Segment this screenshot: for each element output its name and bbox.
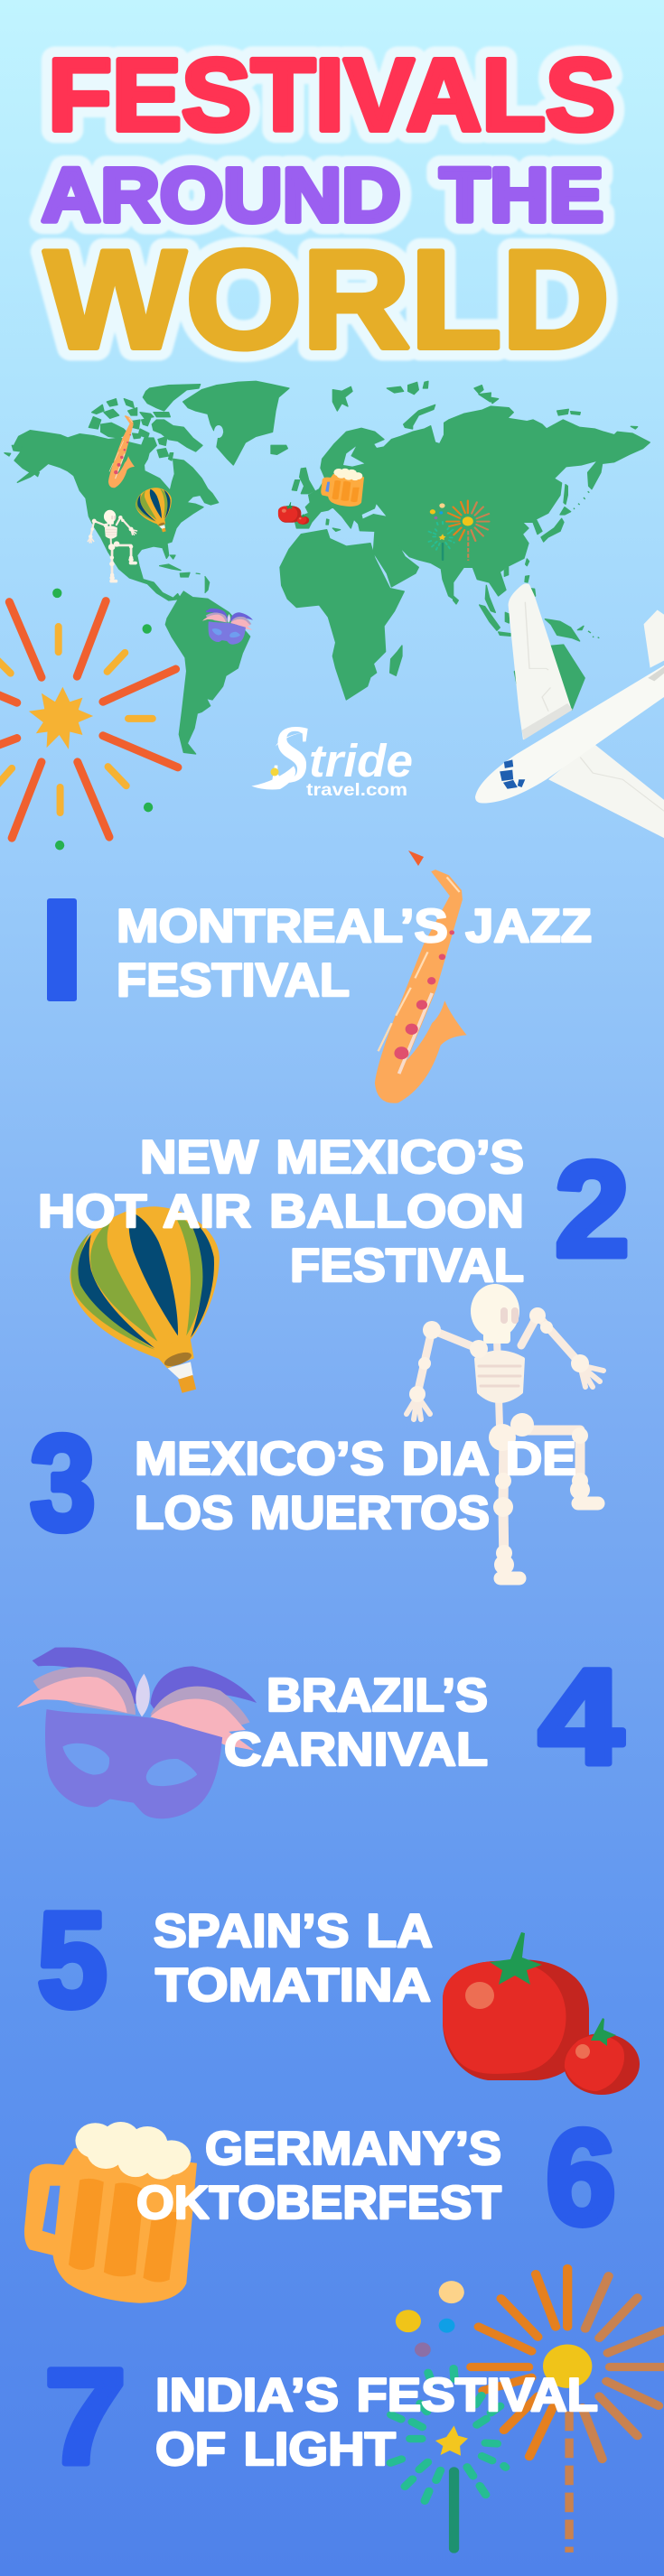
Iceland, British Isles and northern islands — [271, 381, 435, 531]
mini tomatoes on map — [278, 502, 309, 525]
number 5: 5 — [37, 1883, 108, 2035]
Arctic Canada and Caribbean islands — [5, 385, 210, 593]
title line: FESTIVALS: FESTIVALS — [48, 38, 615, 152]
large tomato highlight — [465, 1982, 494, 2009]
floating lights — [396, 2281, 464, 2357]
inland seas — [343, 446, 386, 518]
firework dashed stick — [560, 2412, 578, 2553]
mini fireworks on map — [429, 501, 489, 561]
small tomato light side — [565, 2035, 624, 2091]
title — [42, 38, 615, 377]
balloon burner — [163, 1350, 193, 1369]
number 1: 1 — [23, 875, 99, 1027]
balloon stripes — [71, 1210, 214, 1350]
icon: beer mug — [24, 2122, 197, 2303]
item 2: New Mexico's Hot Air Balloon Festival — [38, 1131, 630, 1292]
text: Mexico's Dia de los Muertos — [135, 1433, 576, 1539]
mini skeleton on map — [88, 510, 137, 581]
logo big S: S — [271, 708, 311, 800]
mini saxophone on map — [108, 415, 135, 488]
lower wing — [548, 743, 664, 838]
Asian and Pacific islands — [454, 386, 638, 641]
mask grey feathers — [33, 1667, 250, 1732]
title line: WORLD: WORLD — [44, 221, 610, 377]
firework green dots — [52, 589, 153, 850]
skeleton skull — [471, 1284, 519, 1338]
mask pink feathers — [17, 1677, 254, 1751]
mini mask on map — [202, 609, 253, 645]
skeleton jaw — [483, 1329, 510, 1344]
sax centre rod — [399, 993, 432, 1074]
wing panel lines — [525, 602, 664, 811]
item 6: Germany's Oktoberfest — [136, 2101, 616, 2253]
mini beer on map — [321, 469, 364, 507]
firework centre — [543, 2345, 592, 2388]
Greenland — [183, 381, 289, 465]
text: Spain's La Tomatina: TOMATINA — [155, 1959, 431, 2012]
text: Spain's La Tomatina: SPAIN’S LA — [154, 1905, 433, 1958]
text: Brazil's Carnival: CARNIVAL — [224, 1724, 488, 1776]
item 3: Mexico's Dia de los Muertos — [30, 1407, 576, 1558]
mini balloon on map — [136, 488, 172, 532]
North America — [14, 431, 219, 600]
fuselage — [475, 665, 664, 804]
icon: tomatoes — [443, 1932, 640, 2095]
text: India's Festival of Light: INDIA’S FESTIVAL — [155, 2369, 598, 2422]
skeleton spine — [497, 1338, 500, 1427]
balloon ropes — [168, 1362, 193, 1380]
item 5: Spain's La Tomatina — [37, 1883, 433, 2035]
text: Spain's La Tomatina — [154, 1905, 433, 2012]
mask eye holes — [62, 1744, 197, 1786]
Greenland lake — [214, 425, 223, 438]
text: India's Festival of Light: OF LIGHT — [155, 2423, 396, 2476]
firework yellow rays — [0, 627, 153, 813]
text: Mexico's Dia de los Muertos: MEXICO’S DIA DE — [135, 1433, 576, 1485]
skeleton rib lines — [479, 1366, 520, 1386]
wing root shading — [522, 703, 573, 739]
South America — [165, 591, 250, 754]
Africa — [280, 530, 404, 700]
firework tan rays — [583, 2276, 664, 2460]
number 2: 2 — [555, 1133, 630, 1285]
sparkler dashes — [390, 2368, 506, 2501]
logo pin — [271, 767, 278, 777]
text: Montreal's Jazz Festival: MONTREAL’S JAZZ — [117, 900, 592, 953]
text: New Mexico's Hot Air Balloon Festival — [38, 1131, 524, 1292]
large tomato dark side — [443, 1959, 589, 2080]
sparkler stick — [444, 2471, 465, 2549]
engine intake — [648, 667, 664, 681]
firework star — [29, 687, 93, 749]
large tomato leaves — [490, 1932, 542, 1985]
sax keys — [394, 930, 454, 1059]
Eurasia — [295, 406, 650, 599]
balloon envelope — [70, 1206, 220, 1360]
tail fin — [644, 609, 664, 668]
logo: Stride travel.com — [251, 708, 413, 800]
left firework — [0, 589, 178, 850]
sax tip marker — [408, 851, 424, 866]
Madagascar — [390, 646, 402, 675]
text: Montreal's Jazz Festival: FESTIVAL — [117, 954, 350, 1007]
logo word tride: tride — [309, 735, 413, 786]
text: Brazil's Carnival — [224, 1669, 488, 1776]
number 1 — [47, 898, 77, 1001]
airplane — [475, 583, 664, 838]
text: New Mexico's Hot Air Balloon Festival: NEW MEXICO’S — [140, 1131, 524, 1184]
skeleton ribcage — [476, 1353, 523, 1401]
text: Mexico's Dia de los Muertos: LOS MUERTOS — [135, 1487, 490, 1539]
mug handle hole — [42, 2186, 61, 2235]
text: New Mexico's Hot Air Balloon Festival: FESTIVAL — [290, 1240, 524, 1292]
mask centre plume — [136, 1674, 150, 1716]
text: Germany's Oktoberfest: OKTOBERFEST — [136, 2177, 501, 2229]
text: Germany's Oktoberfest: GERMANY’S — [205, 2123, 501, 2175]
text: Montreal's Jazz Festival — [117, 900, 592, 1007]
mask purple feathers — [33, 1648, 257, 1713]
number 3: 3 — [30, 1407, 96, 1558]
number 6: 6 — [546, 2101, 616, 2253]
sparkler star — [435, 2425, 468, 2456]
item 4: Brazil's Carnival — [224, 1641, 623, 1792]
balloon collar — [152, 1335, 194, 1368]
text: India's Festival of Light — [155, 2369, 598, 2476]
skeleton arms — [417, 1316, 580, 1394]
item 7: India's Festival of Light — [44, 2340, 598, 2492]
firework orange rays — [471, 2268, 567, 2457]
item 1: Montreal's Jazz Festival — [47, 898, 592, 1001]
world map — [5, 381, 650, 754]
text: Germany's Oktoberfest — [136, 2123, 501, 2229]
foam — [75, 2122, 191, 2180]
large tomato body — [443, 1961, 566, 2074]
title line: AROUND THE: AROUND THE — [42, 153, 603, 237]
skeleton legs — [503, 1430, 580, 1567]
cockpit windows — [500, 759, 525, 789]
mask face — [45, 1709, 222, 1818]
icon: skeleton — [407, 1284, 603, 1578]
Australia — [515, 645, 618, 730]
icon: saxophone — [375, 870, 467, 1103]
balloon basket — [178, 1375, 196, 1393]
number 4: 4 — [538, 1641, 623, 1792]
icon: fireworks and sparkler — [390, 2268, 664, 2553]
logo word travel.com: travel.com — [306, 781, 407, 800]
text: Brazil's Carnival: BRAZIL’S — [267, 1669, 488, 1722]
upper wing — [509, 583, 572, 739]
firework orange rays — [0, 601, 178, 838]
small tomato highlight — [575, 2044, 590, 2059]
beer panels — [69, 2179, 178, 2283]
skeleton eyes — [504, 1311, 515, 1320]
logo swoosh tail — [251, 731, 309, 790]
sax highlights — [379, 877, 460, 1051]
skeleton feet — [500, 1503, 598, 1578]
sax body — [375, 870, 467, 1103]
number 7: 7 — [44, 2340, 126, 2492]
skeleton joints — [409, 1307, 590, 1575]
icon: carnival mask — [17, 1648, 257, 1818]
small tomato leaves — [591, 2018, 616, 2046]
skeleton hands — [407, 1365, 603, 1419]
mug body — [24, 2148, 197, 2303]
text: New Mexico's Hot Air Balloon Festival: HOT AIR BALLOON — [38, 1186, 524, 1238]
icon: hot air balloon — [70, 1206, 220, 1393]
small tomato body — [564, 2033, 640, 2095]
